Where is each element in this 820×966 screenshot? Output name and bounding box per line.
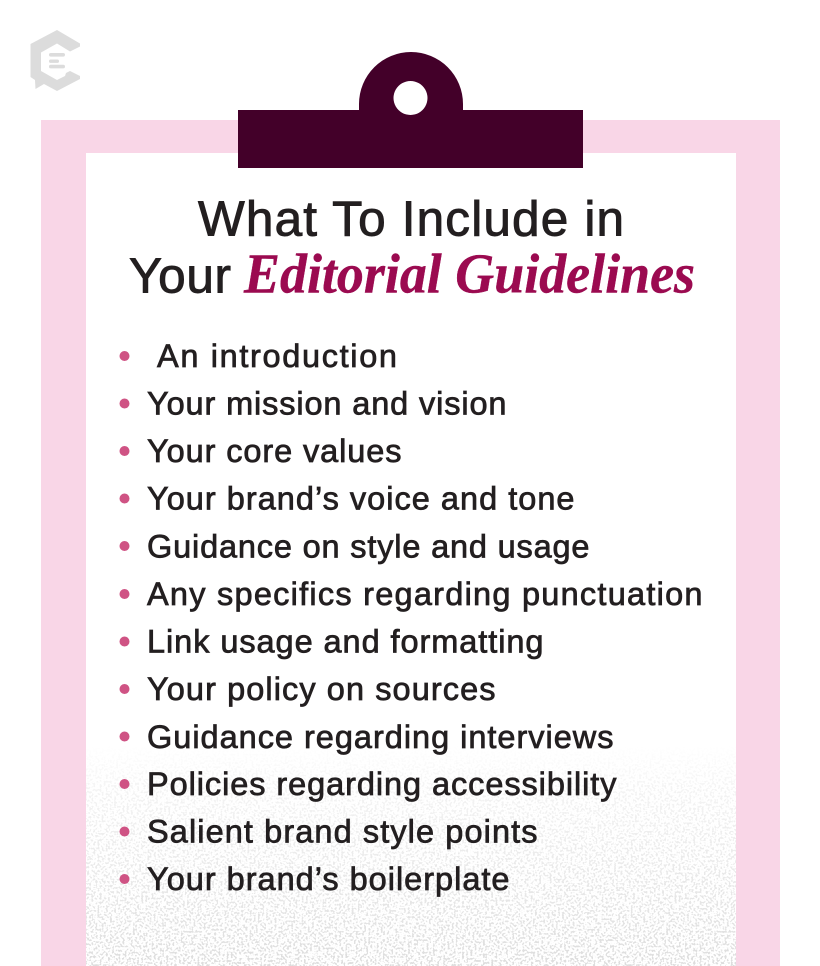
clipboard board	[41, 120, 780, 966]
list text: Your brand’s voice and tone	[147, 480, 574, 516]
logo	[30, 30, 80, 91]
title emphasis: Editorial Guidelines	[243, 244, 695, 306]
list text: Guidance regarding interviews	[147, 719, 614, 755]
list text: Your brand’s boilerplate	[147, 861, 510, 897]
paper sheet	[86, 153, 736, 966]
list text: Salient brand style points	[147, 814, 538, 850]
list text: Guidance on style and usage	[147, 528, 590, 564]
list text: Policies regarding accessibility	[147, 766, 617, 802]
list text: Any specifics regarding punctuation	[147, 576, 702, 612]
list text	[147, 338, 702, 897]
list bullets	[120, 351, 130, 884]
list text: Your policy on sources	[147, 671, 496, 707]
list text: Your core values	[147, 433, 402, 469]
list text: Your mission and vision	[147, 386, 506, 422]
title: What To Include in	[198, 192, 624, 246]
title	[129, 192, 695, 306]
list text: An introduction	[157, 338, 397, 374]
stippled paper texture	[86, 778, 736, 966]
clipboard clip	[238, 52, 583, 168]
checklist	[120, 338, 702, 897]
list text: Link usage and formatting	[147, 624, 544, 660]
title: Your	[129, 248, 231, 304]
